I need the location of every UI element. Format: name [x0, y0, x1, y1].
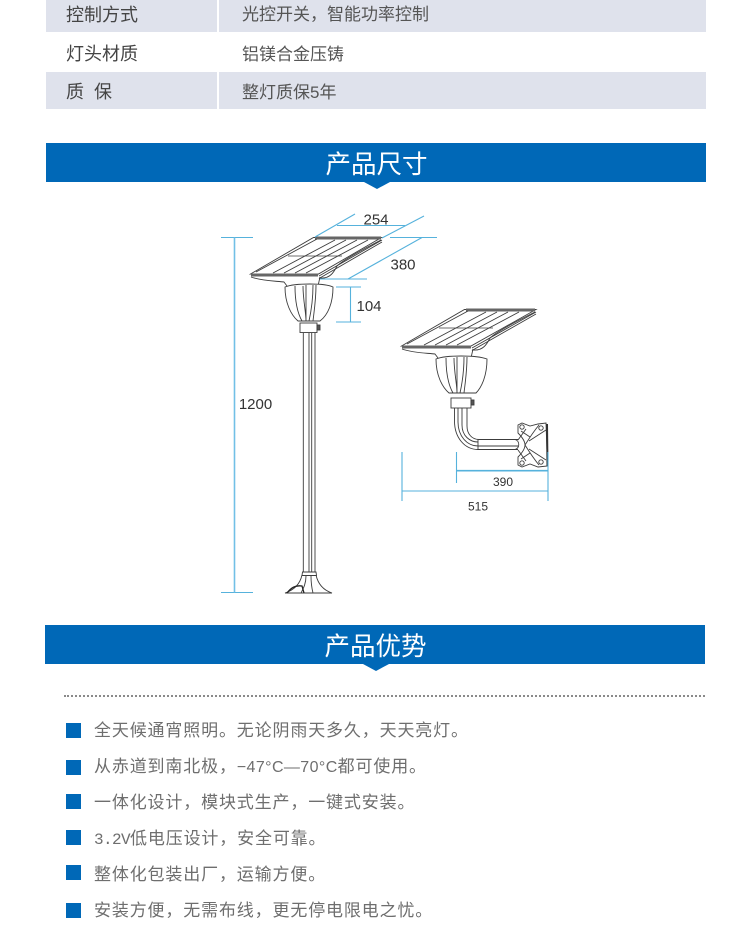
heading pointer: dimensions — [364, 182, 390, 189]
dimension labels: 254 — [363, 212, 389, 228]
row: control method — [46, 0, 706, 32]
row: control method: 控制方式 — [66, 5, 138, 25]
row: warranty: 质 保 — [66, 82, 112, 102]
dimension labels: 515 — [468, 500, 488, 514]
row: warranty — [46, 72, 706, 109]
wall arm and bracket — [454, 408, 548, 467]
row: control method: 光控开关，智能功率控制 — [242, 0, 429, 25]
row: lamp head material: 铝镁合金压铸 — [242, 45, 344, 64]
spec table — [46, 0, 706, 109]
dimension labels: 104 — [356, 298, 382, 315]
heading: product dimensions — [46, 143, 706, 182]
pole lamp head — [250, 238, 382, 332]
list item 3: 一体化设计，模块式生产，一键式安装。 — [94, 793, 415, 812]
list item 1: 全天候通宵照明。无论阴雨天多久，天天亮灯。 — [94, 721, 469, 740]
list item 5: 整体化包装出厂，运输方便。 — [94, 865, 326, 884]
dimension labels: 390 — [493, 475, 513, 489]
dimension labels: 1200 — [239, 396, 272, 413]
advantages list — [64, 695, 705, 920]
list item 4: 3.2V低电压设计，安全可靠。 — [94, 829, 326, 849]
heading: product advantages: 产品优势 — [324, 633, 426, 661]
row: lamp head material: 灯头材质 — [66, 44, 138, 64]
list item 6: 安装方便，无需布线，更无停电限电之忧。 — [94, 901, 433, 920]
dimension lines — [221, 214, 548, 592]
wall lamp head — [402, 310, 536, 408]
pole and base — [285, 333, 332, 593]
heading: product dimensions: 产品尺寸 — [325, 151, 428, 179]
list item 2: 从赤道到南北极，−47°C—70°C都可使用。 — [94, 757, 427, 776]
heading pointer: advantages — [363, 664, 389, 671]
dimension labels — [239, 212, 513, 514]
row: lamp head material — [46, 32, 706, 72]
heading: product advantages — [45, 625, 705, 664]
dimension labels: 380 — [390, 256, 416, 274]
row: warranty: 整灯质保5年 — [242, 83, 336, 102]
